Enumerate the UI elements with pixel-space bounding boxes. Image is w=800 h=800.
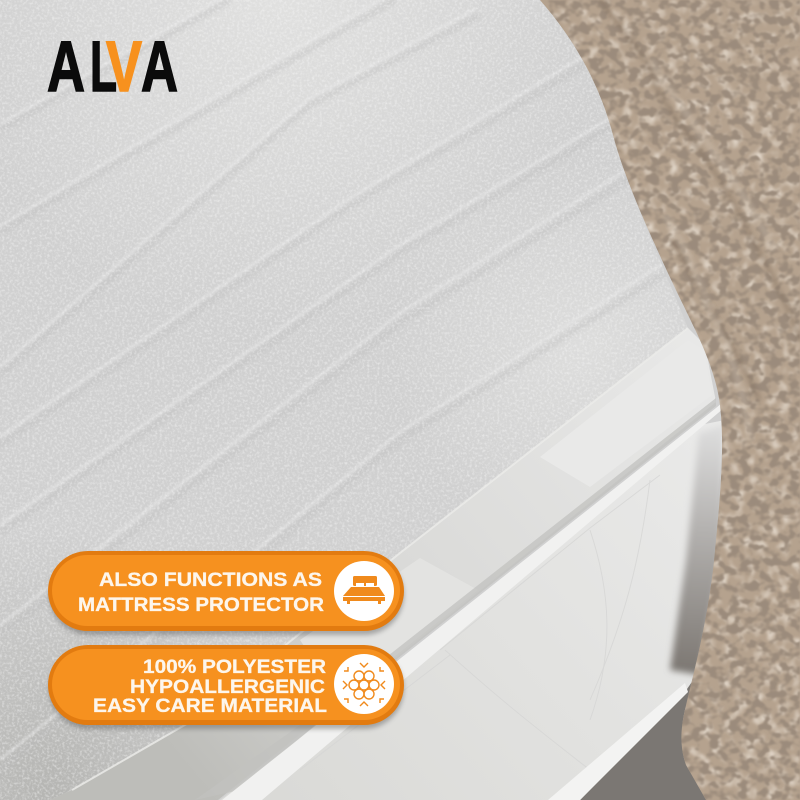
badge text: HYPOALLERGENIC [130,676,325,698]
grey shadow beside the mattress [670,425,724,675]
logo: ALVA [47,28,178,107]
band shaded stripe [195,398,716,800]
badge text: 100% POLYESTER [143,656,326,678]
badge text: EASY CARE MATERIAL [93,695,327,717]
band lower panel highlight [300,558,478,700]
quilting lines [300,475,660,770]
band panel highlight [540,340,712,487]
logo: ALVA: V [106,28,142,107]
knitted throw [540,0,800,800]
badge: polyester, hypoallergenic, easy care [48,645,404,729]
dark base of the bed [580,660,760,800]
icon: bed [334,561,394,621]
logo: ALVA: L [90,28,117,107]
piping line [222,403,724,800]
quilted mattress side panel [220,420,725,800]
fleece bright edge [72,328,688,790]
badge text [78,569,324,616]
logo: ALVA: A [141,28,178,107]
badge text: ALSO FUNCTIONS AS [99,569,322,591]
badge: also functions as mattress protector [48,551,404,635]
throw folds [600,0,800,400]
badge text: MATTRESS PROTECTOR [78,594,324,616]
badge text [93,656,327,717]
icon: honeycomb fibres [334,654,394,714]
logo: ALVA: A [47,28,85,107]
mattress bottom white piping [548,683,688,800]
white mattress band [50,328,716,800]
